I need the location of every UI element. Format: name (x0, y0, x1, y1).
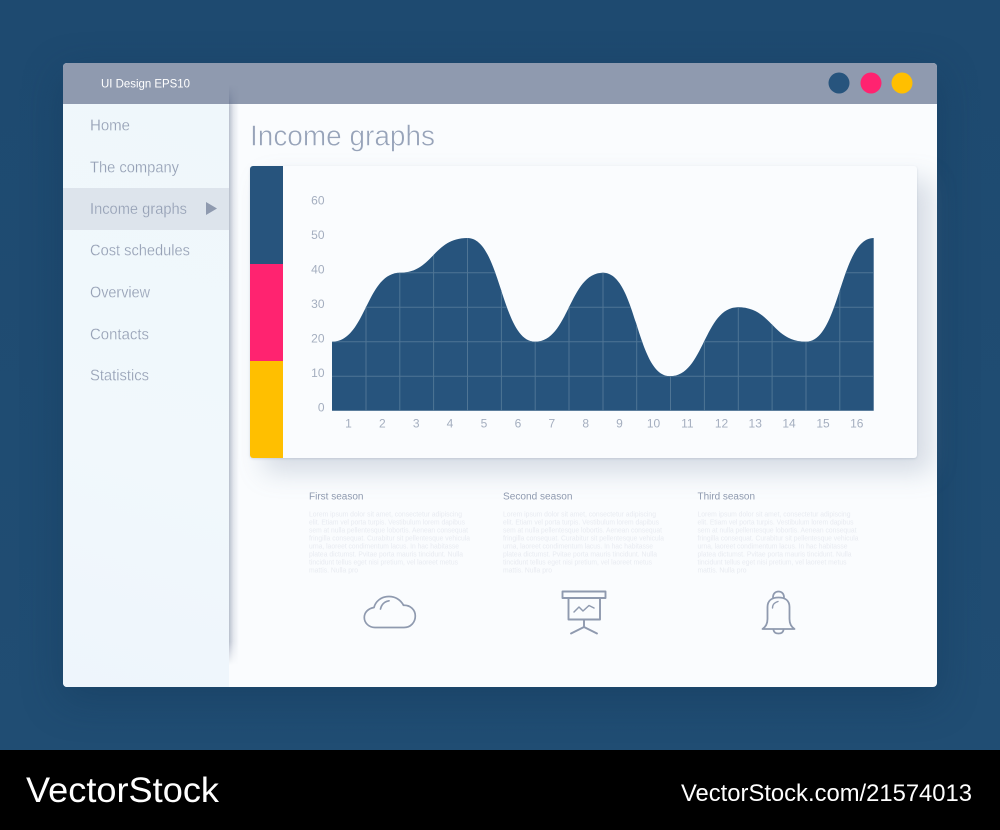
footer id: VectorStock.com/21574013 (681, 780, 972, 807)
icon: presentation board (562, 592, 606, 634)
nav item: Overview: Overview (90, 284, 150, 301)
sidebar shadow (229, 92, 237, 662)
x axis labels: 10 (647, 416, 660, 430)
body text: third season (698, 510, 858, 574)
body text: third season: elit. Etiam vel porta turpis. Vestibulum lorem dapibus (698, 518, 854, 526)
y axis labels: 40 (311, 262, 325, 276)
body text: second season: platea dictumst. Pvitae porta mauris tincidunt. Nulla (503, 550, 657, 558)
body text: third season: urna, laoreet condimentum lacus. In hac habitasse (698, 542, 848, 550)
y axis labels: 50 (311, 228, 325, 242)
page heading: Income graphs (250, 120, 435, 152)
sidebar navigation (63, 104, 229, 687)
nav item: Income graphs: Income graphs (90, 201, 187, 218)
body text: third season: sem at nulla pellentesque lobortis. Aenean consequat (698, 526, 856, 534)
body text: second season: sem at nulla pellentesque lobortis. Aenean consequat (503, 526, 662, 534)
chart card (250, 166, 917, 458)
icon: bell (762, 592, 794, 634)
body text: first season: Lorem ipsum dolor sit amet, consectetur adipiscing (309, 510, 462, 518)
body text: first season: sem at nulla pellentesque lobortis. Aenean consequat (309, 526, 468, 534)
strip: yellow (250, 361, 283, 458)
body text: second season: tincidunt tellus eget nisi pretium, vel laoreet metus (503, 558, 652, 566)
x axis labels: 15 (816, 416, 830, 430)
grid lines (332, 230, 874, 411)
x axis labels (345, 416, 864, 430)
strip: blue (250, 166, 283, 264)
x axis labels: 3 (413, 416, 420, 430)
strip: pink (250, 264, 283, 361)
heading: first season: First season (309, 492, 364, 502)
body text: third season: Lorem ipsum dolor sit amet, consectetur adipiscing (698, 510, 850, 518)
y axis labels: 20 (311, 332, 325, 346)
x axis labels: 8 (582, 416, 589, 430)
y axis labels: 60 (311, 194, 325, 208)
icons row (364, 590, 796, 634)
active arrow icon (206, 202, 217, 215)
body text: second season: mattis. Nulla pro (503, 566, 552, 574)
body text: second season: urna, laoreet condimentum lacus. In hac habitasse (503, 542, 653, 550)
footer logo: VectorStock (26, 771, 220, 810)
x axis labels: 16 (850, 416, 864, 430)
column: first season (309, 492, 470, 574)
heading: third season: Third season (698, 492, 755, 502)
body text: third season: fringilla consequat. Curabitur sit pellentesque vehicula (698, 534, 858, 542)
body text: second season (503, 510, 664, 574)
body text: second season: fringilla consequat. Curabitur sit pellentesque vehicula (503, 534, 664, 542)
colour strip (250, 166, 283, 458)
body text: second season: elit. Etiam vel porta turpis. Vestibulum lorem dapibus (503, 518, 659, 526)
body text: first season (309, 510, 470, 574)
body text: first season: elit. Etiam vel porta turpis. Vestibulum lorem dapibus (309, 518, 465, 526)
area chart (311, 194, 874, 430)
body text: first season: urna, laoreet condimentum lacus. In hac habitasse (309, 542, 459, 550)
nav item: Cost schedules: Cost schedules (90, 242, 190, 260)
x axis labels: 11 (681, 416, 694, 430)
x axis labels: 4 (447, 416, 454, 430)
nav item: The company: The company (90, 159, 179, 176)
x axis labels: 5 (481, 416, 488, 430)
x axis labels: 6 (515, 416, 522, 430)
body text: first season: fringilla consequat. Curabitur sit pellentesque vehicula (309, 534, 470, 542)
x axis labels: 14 (782, 416, 796, 430)
active row highlight (63, 188, 229, 230)
season columns (309, 492, 858, 574)
column: second season (503, 492, 664, 574)
x axis labels: 7 (548, 416, 555, 430)
nav item: Home: Home (90, 117, 130, 134)
body text: first season: tincidunt tellus eget nisi pretium, vel laoreet metus (309, 558, 458, 566)
body text: second season: Lorem ipsum dolor sit amet, consectetur adipiscing (503, 510, 656, 518)
nav item: Statistics: Statistics (90, 368, 149, 384)
window control dots (828, 72, 912, 94)
body text: third season: mattis. Nulla pro (698, 566, 746, 574)
y axis labels: 10 (311, 366, 325, 380)
body text: third season: platea dictumst. Pvitae porta mauris tincidunt. Nulla (698, 550, 852, 558)
nav items (90, 117, 190, 384)
nav item: Contacts: Contacts (90, 326, 149, 343)
area series (332, 238, 874, 411)
body text: third season: tincidunt tellus eget nisi pretium, vel laoreet metus (698, 558, 847, 566)
heading: second season: Second season (503, 492, 572, 502)
header title: UI Design EPS10 (101, 76, 190, 90)
y axis labels: 0 (318, 400, 325, 414)
body text: first season: mattis. Nulla pro (309, 566, 358, 574)
y axis labels: 30 (311, 297, 325, 311)
x axis labels: 2 (379, 416, 386, 430)
window header bar (63, 63, 937, 104)
y axis labels (311, 194, 325, 414)
x axis labels: 1 (345, 416, 352, 430)
x axis labels: 12 (715, 416, 728, 430)
app window (63, 63, 937, 687)
icon: cloud (364, 596, 415, 628)
body text: first season: platea dictumst. Pvitae porta mauris tincidunt. Nulla (309, 550, 463, 558)
x axis labels: 9 (616, 416, 623, 430)
footer band (0, 750, 1000, 830)
x axis labels: 13 (749, 416, 762, 430)
column: third season (698, 492, 858, 574)
